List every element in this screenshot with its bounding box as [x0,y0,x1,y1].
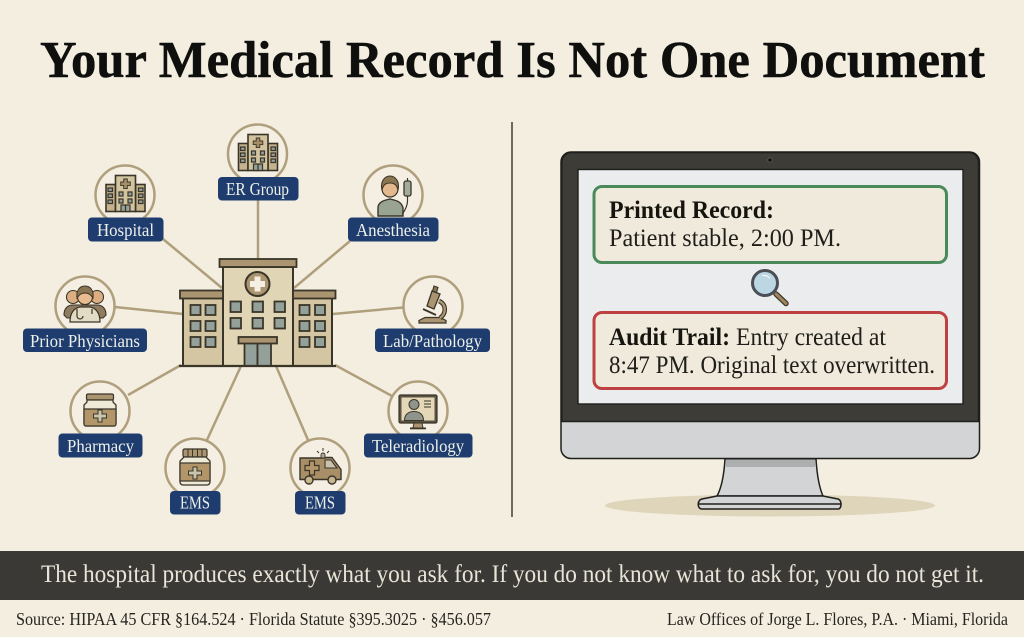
source citation: Source: HIPAA 45 CFR §164.524 · Florida Statute §395.3025 · §456.057 [16,609,491,629]
callout: audit trail: 8:47 PM. Original text overwritten. [609,352,935,379]
node: Hospital: Hospital [97,220,154,240]
title: Your Medical Record Is Not One Document [40,32,986,89]
node: EMS (pill bottle): EMS [180,492,210,512]
icon: hospital [106,176,145,212]
node: Hospital [88,166,164,242]
callout: printed record [594,186,946,262]
node: EMS (pill bottle) [166,438,224,514]
icon: anesthesiologist with IV [378,176,411,216]
takeaway banner [0,551,1024,600]
monitor stand [698,459,841,509]
node: Pharmacy: Pharmacy [67,436,134,456]
icon: microscope [419,286,446,323]
callout: audit trail: Audit Trail: [609,324,730,351]
takeaway banner: The hospital produces exactly what you ask for. If you do not know what to ask for, you do not get it. [41,561,984,588]
central hospital building [179,259,336,366]
node: Pharmacy [58,382,142,458]
node: Teleradiology [364,382,472,458]
icon: pill bottle [180,449,210,485]
icon: ER building [238,134,278,170]
panel: hospital network diagram [23,124,490,514]
icon: group of physicians [64,286,106,322]
connector lines [115,200,403,440]
icon: medicine jar [84,394,116,426]
node: Lab/Pathology [375,276,490,352]
node: ER Group [218,124,298,200]
callout: audit trail [594,312,946,388]
node: Anesthesia: Anesthesia [356,220,430,240]
panel: computer monitor [561,152,980,516]
node: EMS (ambulance) [290,438,350,514]
icon: ambulance [300,448,341,484]
monitor body [561,152,980,458]
icon: telehealth monitor [399,395,437,429]
node: Prior Physicians [23,276,147,352]
node: EMS (ambulance): EMS [305,492,335,512]
callout: audit trail: Entry created at [736,324,886,351]
callout: printed record: Printed Record: [609,197,774,224]
node: Teleradiology: Teleradiology [372,436,464,456]
node: Prior Physicians: Prior Physicians [30,331,140,351]
callout: printed record: Patient stable, 2:00 PM. [609,225,841,252]
icon: magnifying glass [752,270,786,304]
node: Lab/Pathology: Lab/Pathology [383,331,482,351]
node: Anesthesia [348,166,438,242]
node: ER Group: ER Group [226,179,289,199]
